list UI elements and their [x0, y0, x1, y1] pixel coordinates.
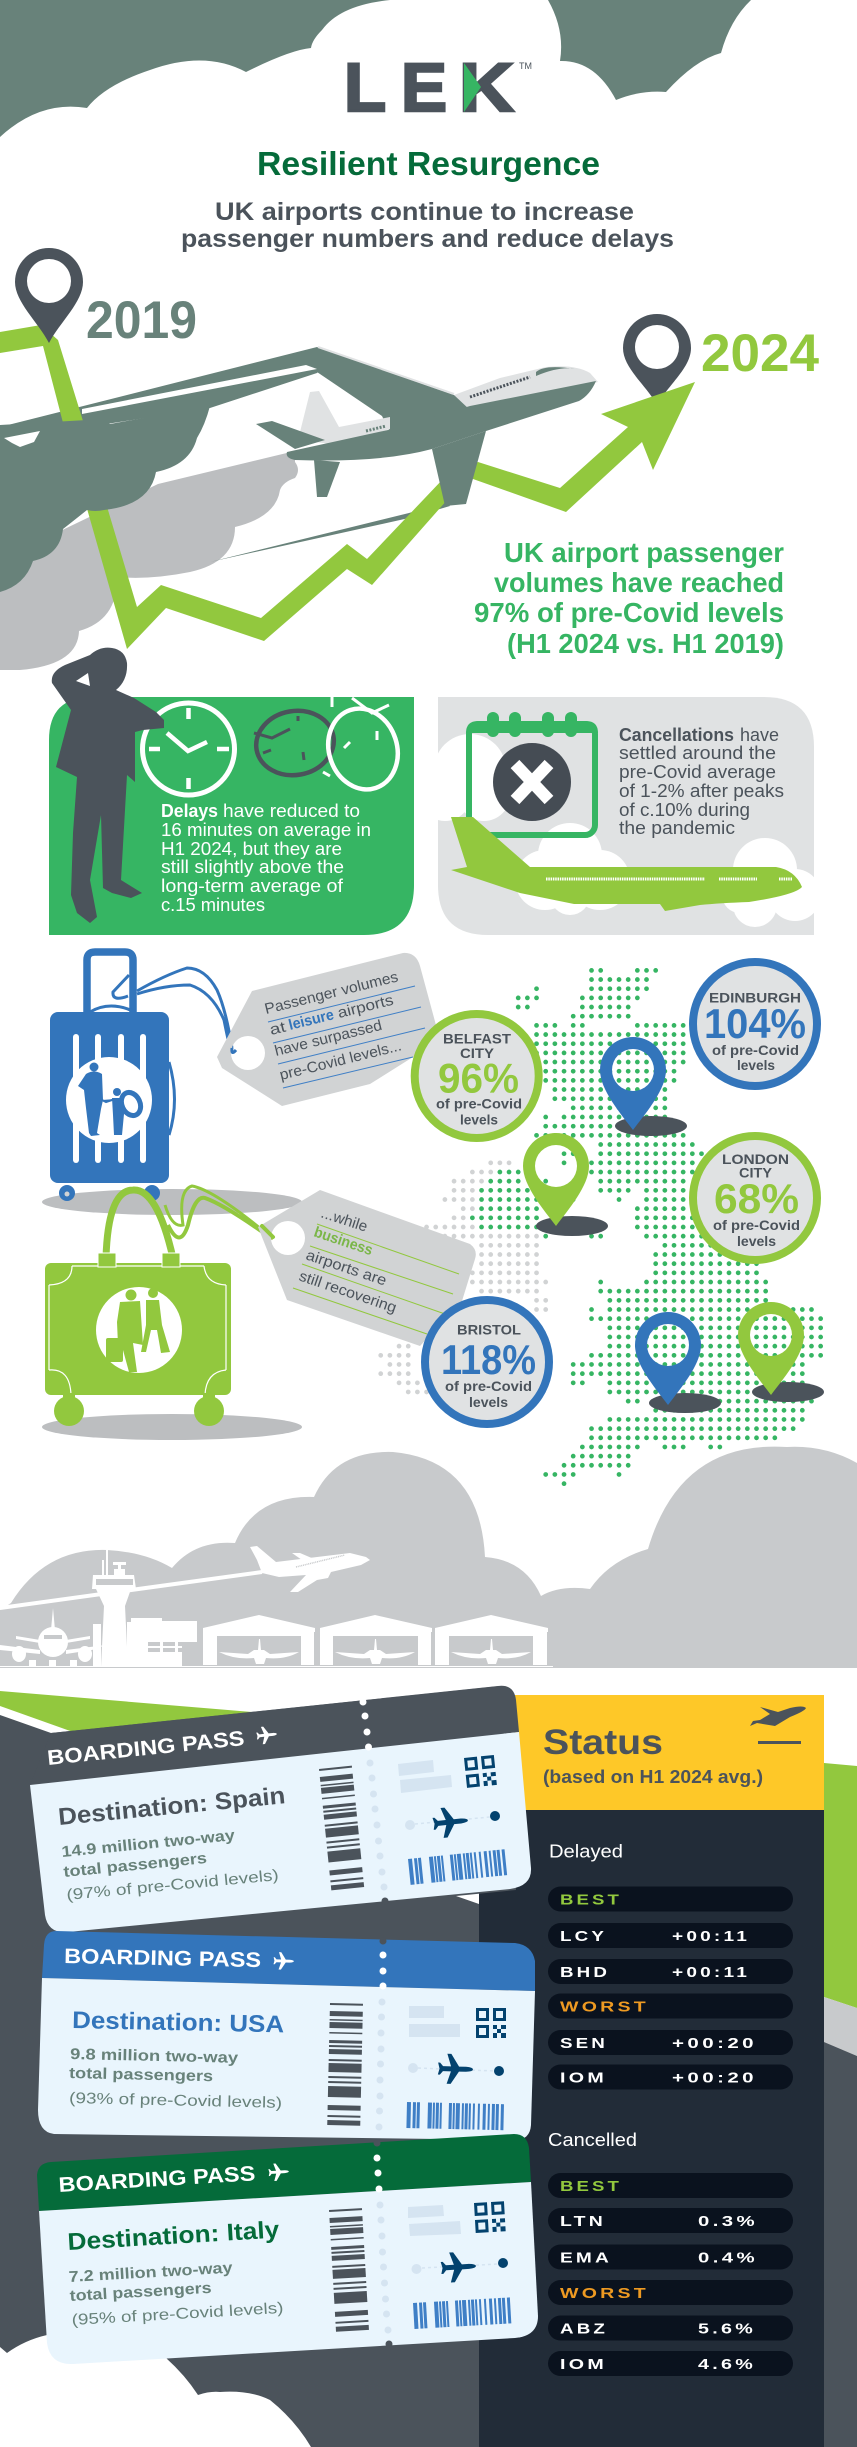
year label 2024: 2024 [701, 324, 820, 383]
delayed table: +00:20 [672, 2035, 757, 2052]
delayed heading: Delayed [549, 1841, 623, 1862]
boarding pass: Spain: total passengers [63, 1850, 208, 1881]
fuselage top [454, 366, 598, 410]
boarding pass: Italy: 7.2 million two-way [68, 2260, 233, 2286]
luggage: green suitcase [42, 1186, 302, 1440]
growth arrow [0, 325, 695, 649]
luggage tag: leisure: pre-Covid levels... [278, 1037, 403, 1084]
delays text: H1 2024, but they are [161, 839, 342, 859]
cancelled table: IOM [560, 2356, 607, 2373]
boarding pass: Italy: BOARDING PASS [58, 2162, 256, 2197]
callout: passenger volumes [474, 537, 784, 659]
pin: 2024 [623, 314, 691, 405]
logo: LEK: L [344, 49, 386, 126]
tail fin [298, 391, 390, 445]
boarding pass: USA: total passengers [69, 2065, 213, 2085]
delayed table: WORST [560, 1998, 649, 2016]
badge: Belfast City [415, 1014, 539, 1138]
figure: man checking watch [52, 648, 164, 923]
badge: London City: CITY [739, 1164, 773, 1180]
clouds [0, 1447, 857, 1668]
badge: Bristol [425, 1300, 549, 1424]
delays text: c.15 minutes [161, 895, 265, 915]
lower section background [0, 1686, 857, 2447]
map: UK dot map [381, 970, 821, 1484]
boarding pass: Spain: Destination: Spain [57, 1782, 287, 1831]
delayed table: +00:20 [672, 2070, 757, 2086]
icon: green airliner [451, 817, 802, 911]
callout: passenger volumes: (H1 2024 vs. H1 2019) [507, 628, 784, 659]
parked aircraft [0, 1608, 106, 1667]
badge: London City: 68% [714, 1175, 799, 1222]
badge: Edinburgh: EDINBURGH [709, 990, 801, 1006]
delayed table: IOM [560, 2070, 607, 2086]
map pin: blue Bristol [635, 1312, 721, 1413]
cancelled table: 4.6% [698, 2356, 756, 2373]
logo: LEK: K [459, 49, 514, 126]
cancelled table: LTN [560, 2213, 606, 2230]
map pin: green London City [738, 1302, 824, 1402]
delays text: Delays [161, 801, 218, 821]
badge: Edinburgh: of pre-Covid [712, 1042, 799, 1058]
cancelled table: 0.3% [698, 2213, 758, 2230]
background clouds: top right [548, 0, 751, 100]
luggage tag: leisure: airports [336, 992, 395, 1022]
delayed table: SEN [560, 2035, 608, 2052]
cancellations text: of c.10% during [619, 800, 750, 820]
subtitle: passenger numbers and reduce delays [181, 225, 674, 253]
badge: Belfast City: 96% [438, 1054, 519, 1102]
luggage strap [165, 1186, 273, 1239]
badge: Edinburgh: 104% [704, 1000, 806, 1047]
delays text: have reduced to [223, 801, 360, 821]
contrail [0, 1572, 262, 1608]
boarding pass: USA: (93% of pre-Covid levels) [69, 2090, 282, 2112]
boarding pass: Italy: Destination: Italy [67, 2216, 281, 2256]
boarding pass: USA: 9.8 million two-way [70, 2046, 239, 2067]
pin: 2019 [15, 248, 83, 343]
boarding pass: Spain: 14.9 million two-way [61, 1827, 236, 1861]
status panel [515, 1695, 824, 2376]
callout: passenger volumes: UK airport passenger [504, 537, 784, 568]
icon: calendar [466, 712, 598, 835]
delays text: 16 minutes on average in [161, 820, 371, 840]
badge: Bristol: levels [469, 1394, 508, 1410]
cancelled heading: Cancelled [548, 2129, 637, 2150]
luggage tag: leisure: leisure [287, 1006, 336, 1034]
boarding pass: USA [38, 1931, 535, 2146]
cancelled table: 5.6% [698, 2320, 756, 2338]
badge: Belfast City: levels [460, 1112, 498, 1128]
logo: LEK: TM [519, 61, 532, 71]
delayed table: BEST [560, 1892, 622, 1908]
status panel: Status [543, 1723, 663, 1762]
cancellations text: Cancellations [619, 725, 734, 745]
icon: clock 3 [318, 697, 408, 798]
flying aircraft [250, 1546, 370, 1592]
logo: LEK: E [401, 49, 447, 126]
delays text [161, 801, 371, 915]
cancelled table: EMA [560, 2250, 612, 2266]
cancelled table: ABZ [560, 2320, 608, 2338]
boarding pass: Italy: total passengers [69, 2280, 212, 2305]
boarding pass: USA: Destination: USA [72, 2007, 284, 2038]
panel: cancellations [419, 697, 821, 935]
cancellations text: have [740, 725, 779, 745]
badge: Belfast City: of pre-Covid [436, 1096, 522, 1112]
cancellations text: the pandemic [619, 818, 735, 838]
badge: Bristol: of pre-Covid [445, 1378, 532, 1394]
delayed table: +00:11 [672, 1928, 750, 1945]
luggage tag: business [258, 1190, 476, 1346]
luggage tag: leisure [217, 953, 440, 1106]
stabiliser [256, 421, 325, 449]
dark cloud [0, 406, 210, 592]
status header [515, 1695, 824, 1810]
cancelled table: WORST [560, 2285, 649, 2302]
map dots: UK green [472, 970, 821, 1484]
callout: passenger volumes: volumes have reached [494, 567, 784, 598]
subtitle [181, 198, 674, 253]
boarding pass: USA: BOARDING PASS [64, 1945, 261, 1972]
badge: Edinburgh [693, 962, 817, 1086]
luggage tag: business: business [312, 1224, 375, 1259]
badge: London City: levels [737, 1233, 776, 1249]
cancellations text: pre-Covid average [619, 762, 776, 782]
icon: clock 1 [142, 703, 234, 795]
badge: Edinburgh: levels [737, 1057, 775, 1073]
lower contrail [210, 502, 450, 562]
cancelled table: BEST [560, 2178, 622, 2195]
badge: Belfast City: BELFAST [443, 1031, 511, 1047]
icon: landing aircraft [750, 1706, 806, 1744]
contrail band [0, 347, 325, 440]
luggage tag: leisure: Passenger volumes [263, 968, 400, 1018]
badge: London City: LONDON [722, 1151, 789, 1167]
boarding pass: Spain [30, 1686, 531, 1932]
delayed table: +00:11 [672, 1964, 750, 1981]
luggage tag: business: still recovering [297, 1268, 399, 1317]
cancellations text: of 1-2% after peaks [619, 781, 784, 801]
cancellations text: settled around the [619, 743, 776, 763]
map pin: green Belfast [523, 1133, 608, 1236]
map pin: blue Edinburgh [600, 1037, 687, 1136]
panel: delays [49, 697, 414, 935]
icon: clock 2 [251, 705, 339, 781]
badge: London City: of pre-Covid [713, 1217, 800, 1233]
badge: London City [693, 1136, 817, 1260]
luggage tag: business: airports are [304, 1247, 389, 1289]
badge: Bristol: 118% [441, 1336, 536, 1383]
boarding pass: Spain: BOARDING PASS [46, 1727, 245, 1770]
year label 2019: 2019 [86, 291, 197, 350]
title: Resilient Resurgence [257, 145, 600, 182]
callout: passenger volumes: 97% of pre-Covid levels [474, 597, 784, 628]
grey cloud [0, 451, 298, 670]
clouds in panel [419, 734, 821, 927]
luggage tag: leisure: at [268, 1018, 289, 1039]
icon: business travellers [106, 1288, 170, 1372]
luggage strap [113, 968, 232, 1052]
logo: LEK [344, 49, 532, 126]
badge: Belfast City: CITY [460, 1045, 495, 1061]
airport scene [0, 1447, 857, 1668]
fuselage [287, 381, 596, 461]
luggage tag: leisure: have surpassed [273, 1017, 384, 1060]
boarding pass: Spain: (97% of pre-Covid levels) [66, 1867, 279, 1904]
cancelled table [548, 2173, 793, 2376]
delayed table [548, 1886, 793, 2090]
delayed table: BHD [560, 1964, 610, 1981]
luggage tag: business: ...while [319, 1205, 370, 1236]
background clouds: top left [0, 0, 390, 137]
status panel: (based on H1 2024 avg.) [543, 1767, 763, 1787]
delays text: still slightly above the [161, 857, 344, 877]
cancelled table: 0.4% [698, 2250, 758, 2266]
far wing [317, 347, 475, 432]
delays text: long-term average of [161, 876, 344, 896]
terminal building [127, 1618, 197, 1667]
cancellations text [619, 725, 784, 838]
icon: parent and child [78, 1062, 144, 1136]
boarding pass: Italy [37, 2134, 538, 2364]
badge: Bristol: BRISTOL [457, 1322, 521, 1338]
delayed table: LCY [560, 1928, 607, 1945]
boarding pass: Italy: (95% of pre-Covid levels) [71, 2300, 284, 2329]
control tower [92, 1550, 136, 1667]
luggage: blue suitcase [42, 952, 302, 1215]
airplane [256, 347, 598, 506]
hangars [203, 1615, 548, 1665]
subtitle: UK airports continue to increase [215, 198, 634, 226]
map dots: Ireland grey [381, 1163, 546, 1392]
near wing [432, 431, 486, 506]
